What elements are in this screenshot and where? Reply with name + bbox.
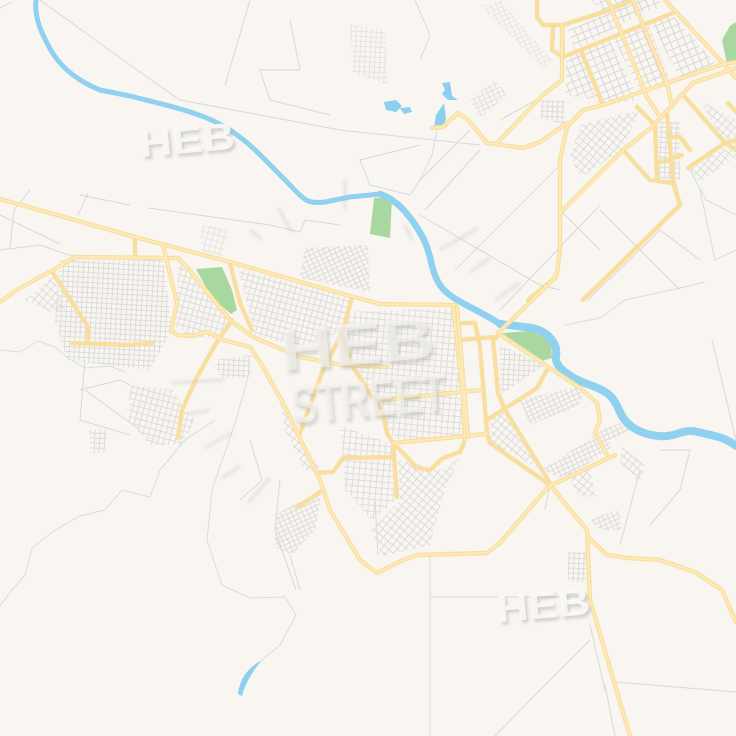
grid: below junction	[215, 355, 252, 378]
street grids	[25, 0, 736, 582]
grid: east of centre	[500, 345, 545, 395]
grid: southeast	[490, 412, 540, 470]
grid: far west	[25, 276, 65, 312]
grid: south central	[340, 425, 395, 520]
watermark: HEB top left: HEB	[137, 116, 237, 166]
lake: south sliver	[238, 660, 262, 696]
grid: east of park	[238, 268, 350, 348]
watermark: HEB bottom right: HEB	[497, 584, 594, 634]
grid: north of highway	[200, 225, 230, 258]
watermark: HEB STREET centre: HEB	[277, 304, 437, 384]
grid: east strip	[520, 385, 585, 425]
grid: west district	[55, 260, 172, 370]
grid: north suburb	[350, 25, 388, 85]
watermark: HEB STREET centre: HEB	[279, 307, 440, 388]
grid: north-central	[300, 245, 370, 292]
watermark: HEB top left: HEB	[140, 119, 239, 169]
lake: ponds north	[384, 100, 412, 114]
watermark: HEB STREET centre	[277, 303, 450, 440]
grid: south	[372, 455, 462, 556]
lakes	[238, 82, 458, 696]
park: river bank	[502, 331, 552, 361]
grid: diagonal strip	[280, 400, 322, 472]
grid: north city	[570, 40, 640, 105]
parks	[196, 22, 736, 361]
park: north strip	[370, 197, 392, 238]
watermark: HEB STREET centre: STREET	[291, 366, 450, 439]
river	[36, 0, 736, 446]
grid: southern west	[128, 385, 195, 445]
watermark: blurred diagonal streaks	[172, 180, 520, 503]
watermark: HEB bottom right: HEB	[494, 581, 592, 631]
watermark: HEB STREET centre: STREET	[288, 362, 448, 435]
grid: southwest suburb	[275, 490, 322, 555]
grid: small east blocks	[567, 470, 596, 497]
grid: downtown	[345, 308, 465, 440]
park: west city	[196, 267, 237, 314]
park: north-east	[722, 22, 736, 64]
grid: small block	[90, 430, 108, 453]
grid: between west roads	[176, 260, 230, 340]
